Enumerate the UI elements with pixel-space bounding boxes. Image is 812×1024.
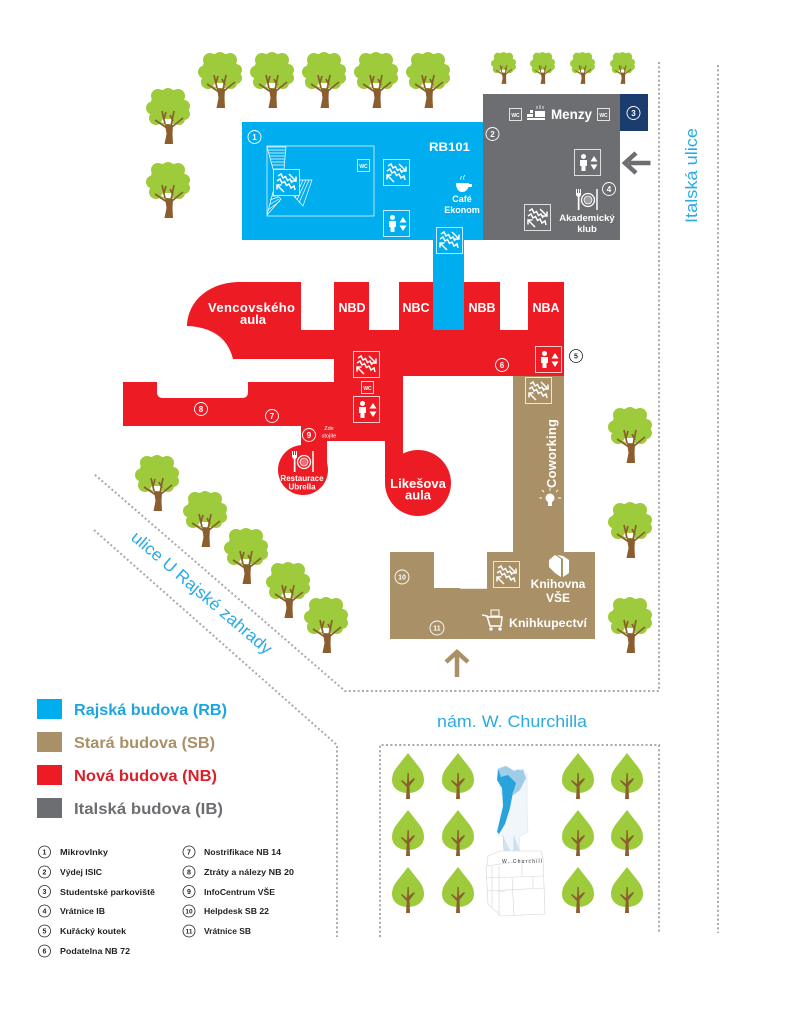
marker 7: 7 <box>270 412 275 421</box>
item 2: 2 <box>43 870 47 876</box>
label: Coworking: Coworking <box>544 419 559 488</box>
item 7 <box>183 846 281 858</box>
trees: right column <box>608 407 652 653</box>
legend item: Stará budova: Stará budova (SB) <box>74 735 215 752</box>
marker 1: 1 <box>252 133 257 142</box>
marker 6 <box>496 358 508 372</box>
parking <box>620 94 648 131</box>
item 7: Nostrifikace NB 14 <box>204 847 281 857</box>
square label: nám. W. Churchilla: nám. W. Churchilla <box>437 712 588 731</box>
item 3 <box>38 886 155 898</box>
item 4: Vrátnice IB <box>60 906 105 916</box>
marker 6: 6 <box>500 361 505 370</box>
label: Café Ekonom: Café <box>452 194 472 204</box>
item 9 <box>183 886 275 898</box>
icon: stairs SB top <box>526 378 552 404</box>
trees: left pair <box>146 88 190 218</box>
icon: books <box>549 555 569 577</box>
label: RB101: RB101 <box>429 140 470 154</box>
marker 1 <box>248 130 261 144</box>
label: Likešova: Likešova <box>390 476 447 491</box>
arrow: Stará entrance <box>446 652 468 677</box>
item 9: 9 <box>187 889 191 896</box>
marker 4 <box>602 182 616 196</box>
item 10 <box>183 905 269 917</box>
item 5 <box>38 925 126 937</box>
trees: diagonal <box>135 455 348 653</box>
label: Café Ekonom: Ekonom <box>444 205 480 215</box>
icon: WC right: WC <box>599 113 608 119</box>
icon: shopping cart <box>482 610 502 630</box>
label: Restaurace Ubrella: Restaurace <box>280 474 324 483</box>
street label: Italská ulice: Italská ulice <box>682 128 701 223</box>
item 5: 5 <box>43 928 47 936</box>
Rajská budova building <box>242 122 483 330</box>
marker 10 <box>395 570 409 584</box>
icon: light bulb <box>540 488 561 506</box>
marker 7 <box>266 410 278 422</box>
legend item: Stará budova <box>37 732 215 752</box>
legend <box>37 699 227 818</box>
marker 3: 3 <box>631 109 636 118</box>
marker 11 <box>430 621 444 635</box>
item 3: 3 <box>43 889 47 896</box>
marker 10: 10 <box>398 574 406 582</box>
item 7: 7 <box>187 850 191 856</box>
label: Knihovna VŠE: VŠE <box>546 590 570 605</box>
Stará budova building <box>390 376 595 639</box>
label: Vencovského: Vencovského <box>208 300 295 315</box>
Nová budova building <box>123 282 564 516</box>
marker 4: 4 <box>607 185 612 194</box>
room outline with hatched stairwell <box>267 146 374 216</box>
label: aula: aula <box>405 488 432 502</box>
marker 8 <box>194 402 208 416</box>
icon: lift RB <box>384 210 410 236</box>
item 6: Podatelna NB 72 <box>60 946 130 956</box>
Italská budova building <box>483 94 620 240</box>
icon: stairs NB <box>354 352 380 378</box>
label: aula: aula <box>240 312 267 327</box>
item 8: 8 <box>187 870 191 876</box>
icon: stairs connector <box>436 228 462 254</box>
label: Knihkupectví: Knihkupectví <box>509 616 588 630</box>
item 1: 1 <box>43 850 47 856</box>
label: Akademický klub: klub <box>577 224 597 235</box>
label: Akademický klub: Akademický <box>559 213 615 224</box>
icon: lift NB <box>354 396 380 422</box>
legend item: Nová budova: Nová budova (NB) <box>74 768 217 785</box>
street label: ulice U Rajské zahrady: ulice U Rajské zahrady <box>127 528 276 659</box>
item 8: Ztráty a nálezy NB 20 <box>204 867 294 877</box>
icon: lift IB <box>574 150 600 176</box>
item 10: Helpdesk SB 22 <box>204 906 269 916</box>
label: W. Churchill: W. Churchill <box>502 859 542 865</box>
label: Menzy: Menzy <box>551 107 592 122</box>
icon: canteen <box>527 105 545 120</box>
marker 11: 11 <box>433 626 441 632</box>
label: Zde stojíte: Zde <box>324 426 334 432</box>
icon: WC RB: WC <box>359 164 368 170</box>
marker 8: 8 <box>199 405 204 414</box>
item 10: 10 <box>185 908 193 916</box>
item 2: Výdej ISIC <box>60 867 102 877</box>
trees: small row <box>491 52 635 84</box>
label: Knihovna VŠE: Knihovna <box>531 577 585 591</box>
item 4: 4 <box>43 908 47 916</box>
pedestal <box>486 851 545 916</box>
item 5: Kuřácký koutek <box>60 926 126 936</box>
item 1: Mikrovlnky <box>60 847 108 857</box>
square trees <box>392 753 643 913</box>
numbered list <box>38 846 294 957</box>
marker 2 <box>486 128 499 140</box>
icon: stairs IB <box>524 204 550 230</box>
item 2 <box>38 866 102 878</box>
legend item: Rajská budova: Rajská budova (RB) <box>74 702 227 719</box>
label: NBB: NBB <box>468 301 496 315</box>
icon: WC NB: WC <box>363 386 372 392</box>
icon: lift SB <box>460 562 486 588</box>
label: NBA: NBA <box>532 301 560 315</box>
marker 9: 9 <box>307 431 312 440</box>
icon: WC left: WC <box>511 113 520 119</box>
marker 5 <box>570 350 582 362</box>
legend item: Rajská budova <box>37 699 227 719</box>
icon: restaurant <box>292 451 313 472</box>
icon: coffee cup <box>456 175 472 192</box>
dotted paths and streets <box>94 62 718 937</box>
icon: restaurant IB <box>576 189 597 210</box>
icon: WC RB <box>358 160 370 172</box>
icon: lift NBA <box>536 346 562 372</box>
item 11: Vrátnice SB <box>204 926 251 936</box>
marker 5: 5 <box>574 354 578 360</box>
Churchill statue <box>486 766 545 916</box>
icon: stairs RB <box>384 160 410 186</box>
label: Zde stojíte: stojíte <box>322 434 336 440</box>
item 3: Studentské parkoviště <box>60 887 155 897</box>
icon: WC right <box>598 108 610 120</box>
label: NBD: NBD <box>338 301 366 315</box>
marker 2: 2 <box>490 130 495 139</box>
legend item: Italská budova: Italská budova (IB) <box>74 801 223 818</box>
label: NBC: NBC <box>402 301 430 315</box>
item 9: InfoCentrum VŠE <box>204 886 275 897</box>
trees: top row <box>198 52 450 108</box>
icon: WC left <box>510 108 522 120</box>
item 8 <box>183 866 294 878</box>
marker 9 <box>302 428 316 442</box>
item 6: 6 <box>43 948 47 956</box>
icon: WC NB <box>362 382 374 394</box>
arrow: Italská entrance <box>625 153 650 173</box>
item 4 <box>38 905 105 917</box>
label: Restaurace Ubrella: Ubrella <box>288 482 316 492</box>
icon: stairs SB bottom <box>494 562 520 588</box>
item 6 <box>38 945 130 957</box>
item 11 <box>183 925 251 937</box>
legend item: Nová budova <box>37 765 217 785</box>
icon: stairs in room <box>273 169 300 196</box>
item 1 <box>38 846 108 858</box>
legend item: Italská budova <box>37 798 223 818</box>
item 11: 11 <box>186 928 193 936</box>
